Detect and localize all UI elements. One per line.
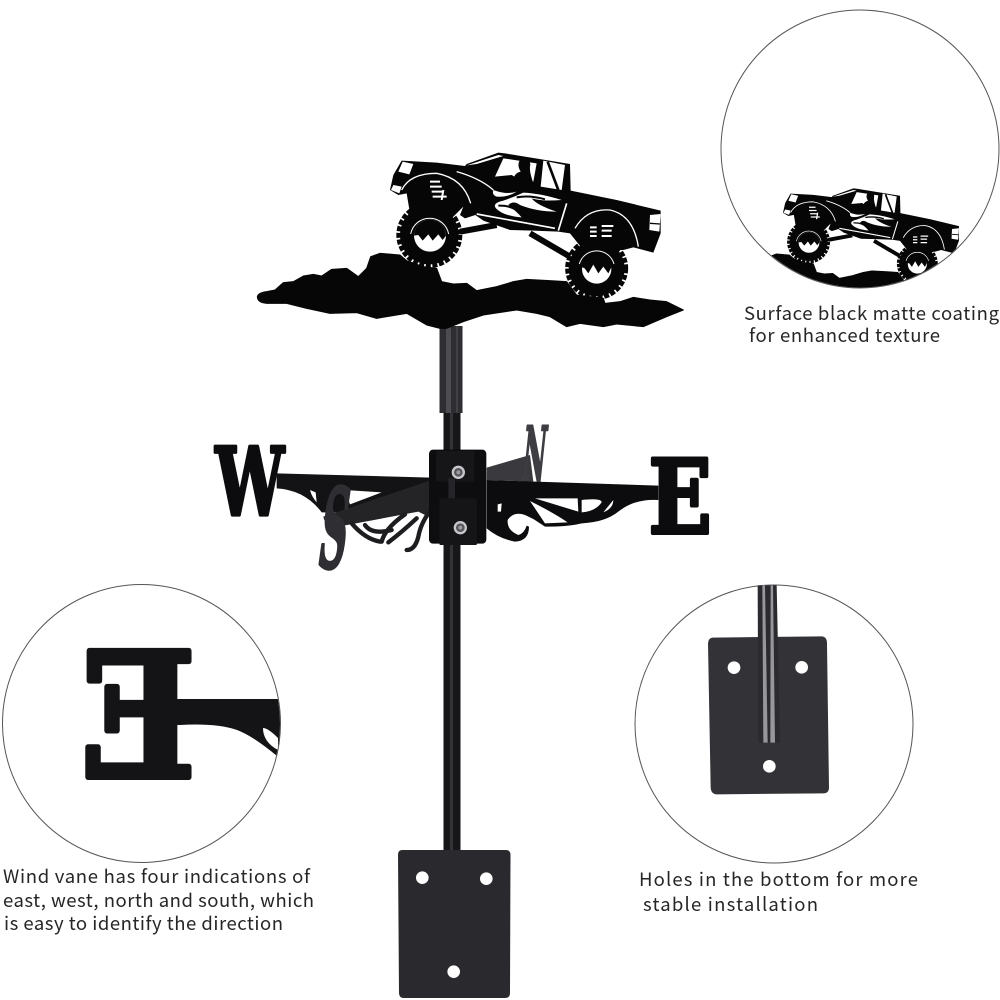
mirrored letter: E [80, 616, 196, 818]
east arm with scroll [487, 480, 658, 542]
truck close-up [771, 188, 959, 288]
flame graphics [493, 190, 562, 217]
tail light [649, 214, 661, 232]
letter W: W [215, 426, 286, 538]
caption: east, west, north and south, which [3, 887, 314, 913]
base mounting plate [398, 850, 510, 998]
shock absorbers [430, 182, 613, 236]
terrain [257, 253, 683, 328]
caption: stable installation [643, 891, 818, 917]
front wheel [399, 204, 460, 266]
letter E: E [649, 437, 712, 557]
windows and driver [467, 155, 565, 190]
circle outline [721, 10, 999, 288]
caption: for enhanced texture [749, 322, 940, 348]
caption [3, 863, 314, 936]
suspension arms [460, 225, 570, 257]
arm stub [177, 699, 282, 760]
bolt bottom [454, 521, 467, 534]
panel: matte coating detail [697, 10, 1000, 348]
west arm [277, 473, 432, 512]
circle outline [2, 584, 280, 862]
south arm and scroll [323, 480, 438, 550]
caption: is easy to identify the direction [4, 910, 283, 936]
circle outline [635, 585, 913, 863]
rear wheel [567, 239, 626, 298]
truck body [390, 153, 661, 253]
headlights [391, 162, 413, 193]
panel: mounting holes detail [635, 585, 918, 917]
north arm [487, 455, 533, 482]
plate close-up [708, 585, 829, 794]
letter N: N [518, 410, 551, 500]
main pole [440, 326, 462, 852]
caption: Surface black matte coating [744, 300, 1000, 326]
letter S: S [312, 464, 358, 594]
caption: Holes in the bottom for more [639, 866, 918, 892]
bolt top [452, 466, 465, 479]
mounting bracket [429, 450, 486, 545]
compass arms assembly [215, 410, 712, 594]
letter E close-up [85, 648, 280, 780]
caption [744, 300, 1000, 348]
fender lines [402, 172, 638, 247]
door and sill lines [477, 203, 567, 231]
caption [639, 866, 918, 917]
truck and terrain silhouette [257, 153, 683, 328]
caption: Wind vane has four indications of [3, 863, 311, 889]
panel: direction letters detail [2, 584, 314, 936]
